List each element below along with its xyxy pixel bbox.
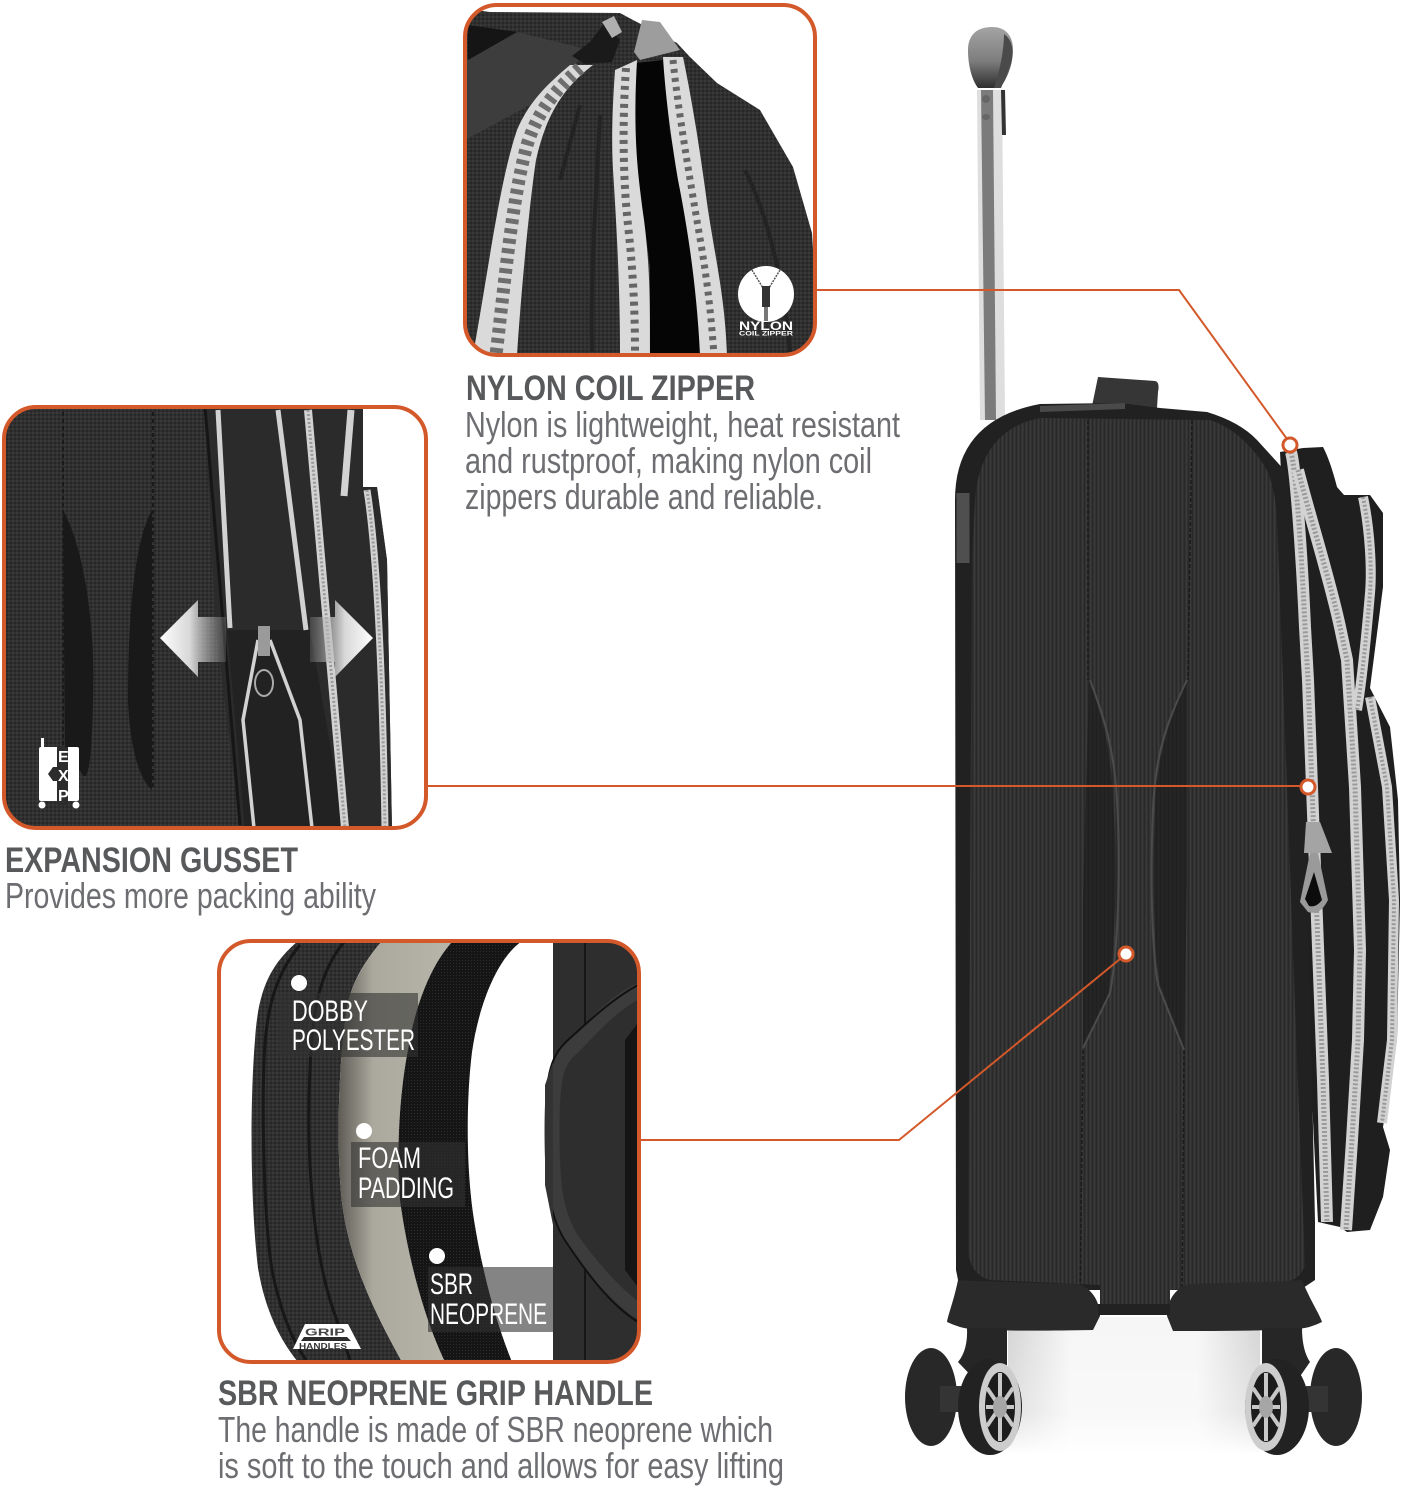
label: foam padding: PADDING — [358, 1172, 454, 1205]
expandable suitcase badge: X — [58, 768, 69, 785]
text block: SBR neoprene grip handle: SBR NEOPRENE GRIP HANDLE — [218, 1374, 653, 1413]
panel frame — [465, 5, 815, 355]
suitcase — [905, 27, 1400, 1455]
callout line: grip handle — [640, 947, 1133, 1140]
zipper photo — [460, 5, 820, 360]
luggage side strip — [553, 941, 643, 1362]
panel: SBR neoprene grip handle — [219, 941, 643, 1362]
nylon coil zipper badge — [738, 266, 794, 338]
seams — [1080, 420, 1192, 1305]
dobby trim seams — [263, 941, 350, 1360]
dobby polyester layer — [252, 941, 402, 1362]
panel: expansion gusset — [0, 405, 426, 830]
label: SBR neoprene: NEOPRENE — [430, 1298, 547, 1331]
main body trim — [955, 403, 1315, 1290]
expansion side with pockets — [1280, 447, 1400, 1232]
label: dobby polyester — [278, 975, 418, 1057]
callout line: expansion gusset — [426, 780, 1315, 794]
panel: nylon coil zipper — [460, 5, 820, 360]
neoprene layer — [398, 941, 522, 1362]
foam padding layer — [339, 941, 453, 1362]
text block: nylon coil zipper: Nylon is lightweight, heat resistant — [465, 404, 900, 445]
text block: expansion gusset: Provides more packing ability — [5, 875, 376, 916]
callout line: zipper — [815, 290, 1297, 452]
grip handles badge — [293, 1324, 361, 1351]
text block: SBR neoprene grip handle: is soft to the touch and allows for easy lifting — [218, 1445, 784, 1486]
label: dobby polyester: DOBBY — [292, 995, 368, 1028]
text block: nylon coil zipper: and rustproof, making nylon coil — [465, 440, 872, 481]
label: foam padding: FOAM — [358, 1142, 421, 1175]
right wheels — [1245, 1328, 1362, 1455]
label: SBR neoprene: SBR — [430, 1268, 473, 1301]
text block: expansion gusset — [5, 841, 376, 916]
panel frame — [4, 407, 426, 828]
label: foam padding — [351, 1123, 465, 1207]
nylon coil zipper badge: COIL ZIPPER — [739, 330, 793, 338]
text block: nylon coil zipper: zippers durable and reliable. — [465, 476, 823, 517]
zipper pull — [1300, 822, 1332, 913]
panel frame — [219, 941, 639, 1362]
expandable suitcase badge: P — [58, 788, 69, 805]
caster housings — [947, 1280, 1322, 1331]
label: dobby polyester: POLYESTER — [292, 1024, 415, 1057]
main fabric panel — [968, 418, 1305, 1305]
zipper slider — [255, 626, 273, 696]
grip handles badge: HANDLES — [299, 1342, 348, 1351]
side zippers — [1291, 452, 1394, 1230]
side grip handle — [1083, 680, 1187, 1050]
grip handles badge: GRIP — [305, 1326, 345, 1338]
gusset photo — [6, 409, 392, 826]
left wheels — [905, 1328, 1022, 1455]
expandable suitcase badge: E — [58, 749, 69, 766]
top carry handle — [1092, 377, 1159, 408]
expansion arrows — [160, 600, 373, 677]
text block: SBR neoprene grip handle — [218, 1374, 784, 1486]
text block: nylon coil zipper — [465, 369, 900, 517]
text block: nylon coil zipper: NYLON COIL ZIPPER — [466, 369, 755, 408]
text block: expansion gusset: EXPANSION GUSSET — [5, 841, 298, 880]
handle cross-section photo — [219, 941, 643, 1362]
trim highlights — [963, 406, 1125, 563]
text block: SBR neoprene grip handle: The handle is made of SBR neoprene which — [218, 1409, 773, 1450]
floor shadow — [1008, 1317, 1260, 1455]
telescoping handle — [968, 27, 1013, 420]
expandable suitcase badge — [38, 738, 80, 808]
label: SBR neoprene — [428, 1248, 553, 1332]
nylon coil zipper badge: NYLON — [739, 321, 793, 333]
